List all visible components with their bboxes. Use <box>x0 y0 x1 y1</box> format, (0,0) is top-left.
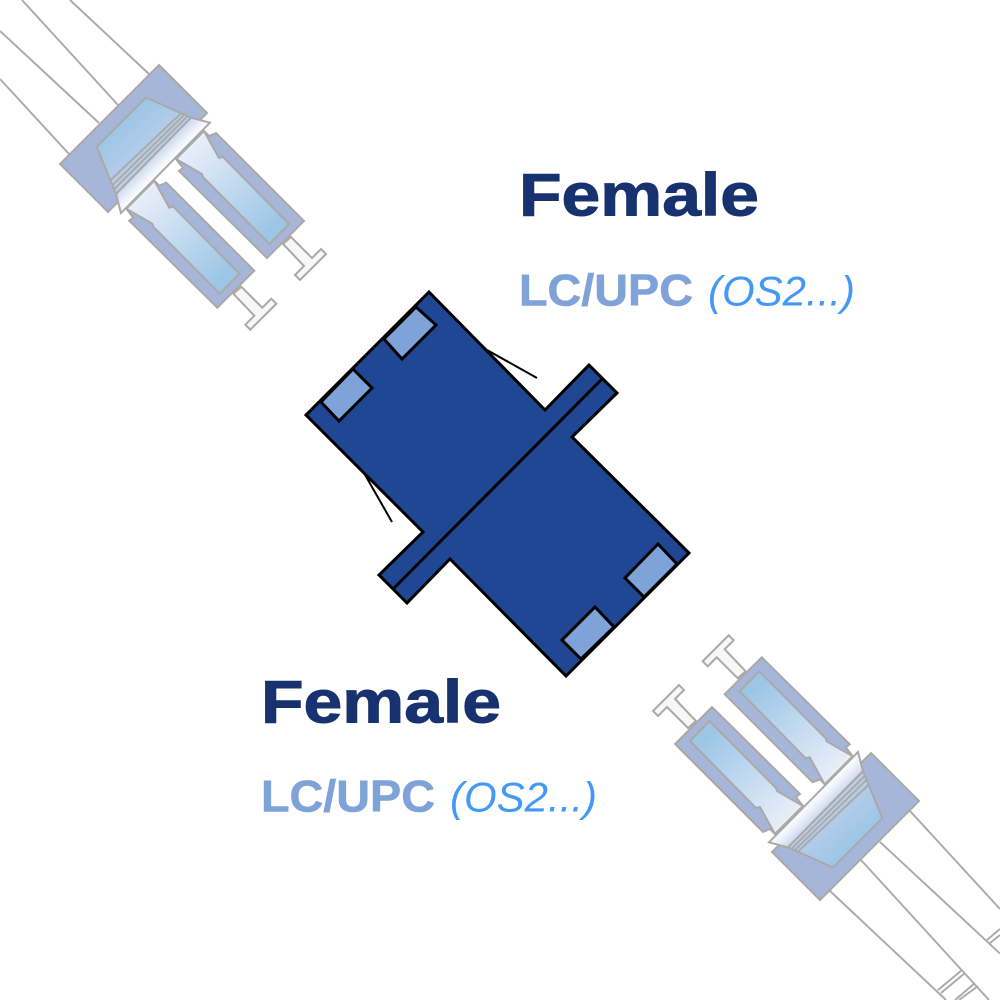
port window 3 <box>625 544 677 597</box>
connector: bottom right LC duplex plug <box>653 635 1000 1000</box>
housing window <box>788 771 882 868</box>
flange centre line <box>393 378 603 589</box>
cables <box>830 811 1000 1000</box>
pull tabs <box>233 237 326 330</box>
ridges <box>791 776 868 852</box>
ferrule leg: upper <box>176 131 304 258</box>
port window 4 <box>562 607 614 659</box>
label: bottom connector type: LC/UPC <box>261 773 435 822</box>
port window 1 <box>384 307 436 359</box>
label: top connector type: LC/UPC <box>519 267 693 316</box>
label: top connector type: (OS2...) <box>708 268 855 315</box>
spring whisker: bottom <box>364 473 392 522</box>
ferrule leg: lower <box>725 657 853 784</box>
housing window <box>97 98 191 194</box>
ferrule leg: lower <box>126 181 254 308</box>
boot housing <box>60 65 207 212</box>
heading: top Female: Female <box>519 162 759 229</box>
clip wedge <box>769 752 863 847</box>
cable bands at bottom right edge <box>938 929 1000 1000</box>
heading: bottom Female: Female <box>261 668 501 735</box>
connector: top left LC duplex plug <box>0 0 326 330</box>
adapter body with flange <box>306 292 689 676</box>
spring whisker: top <box>487 350 537 378</box>
clip wedge <box>116 118 210 213</box>
adapter: female LC/UPC coupler <box>306 292 689 676</box>
boot housing <box>772 753 919 900</box>
ridges <box>111 113 188 189</box>
port window 2 <box>321 369 372 421</box>
label: bottom connector type: (OS2...) <box>450 774 597 821</box>
cables <box>0 0 149 154</box>
pull tabs <box>653 635 746 728</box>
ferrule leg: upper <box>675 707 803 834</box>
